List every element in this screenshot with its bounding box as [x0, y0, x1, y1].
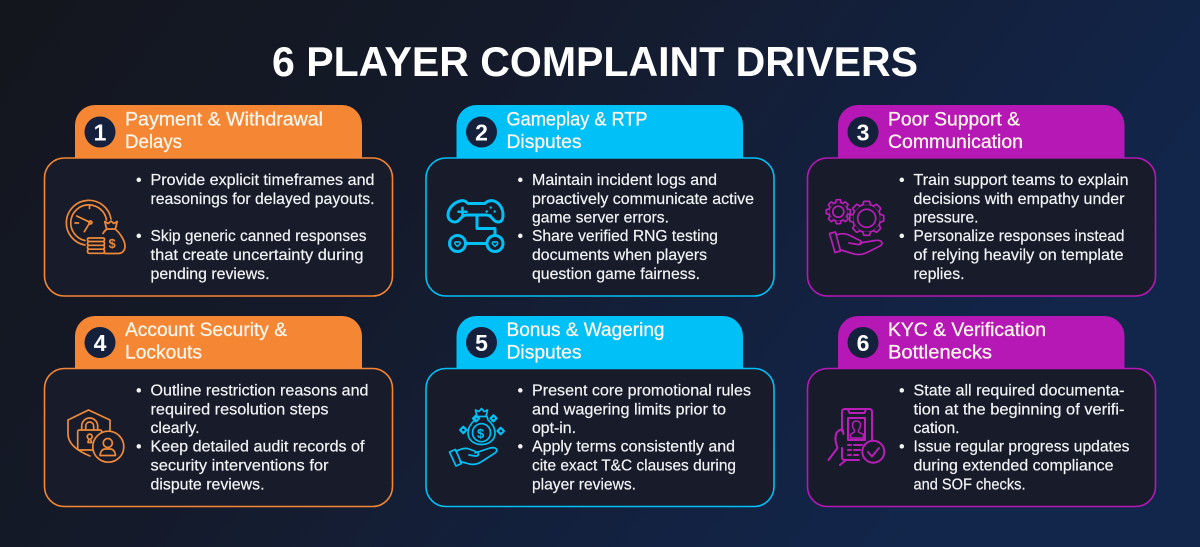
- bullet text 6: tion at the beginning of verifi-: [914, 402, 1124, 418]
- tab heading 2: [456, 105, 743, 160]
- bullet text 2: Maintain incident logs and: [532, 172, 717, 189]
- bullet text 4: dispute reviews.: [150, 476, 264, 494]
- bullet text 2: documents when players: [532, 247, 707, 264]
- bullet text 1: Skip generic canned responses: [150, 228, 366, 245]
- tab heading 3: 3: [857, 120, 869, 146]
- bullet text 4: Keep detailed audit records of: [150, 438, 365, 456]
- tab heading 4: 4: [94, 330, 107, 356]
- tab heading 5: Bonus & Wagering: [506, 319, 664, 341]
- bullet text 1: that create uncertainty during: [150, 247, 364, 264]
- tab heading 6: KYC & Verification: [888, 319, 1046, 341]
- bullet text 6: State all required documenta-: [914, 382, 1124, 400]
- bullet text 3: decisions with empathy under: [914, 191, 1125, 208]
- tab heading 1: 1: [94, 120, 107, 146]
- tab heading 3: Poor Support &: [888, 108, 1020, 130]
- bullet text 5: [518, 382, 751, 494]
- bullet text 2: game server errors.: [532, 210, 669, 226]
- bullet text 6: and SOF checks.: [914, 476, 1026, 494]
- bullet text 2: Share verified RNG testing: [532, 228, 718, 245]
- panel: KYC and verification bottlenecks: [808, 316, 1156, 506]
- tab heading 5: Disputes: [506, 342, 582, 364]
- bullet text 4: Outline restriction reasons and: [150, 382, 368, 400]
- tab heading 4: [75, 316, 362, 371]
- bullet text 2: proactively communicate active: [532, 191, 754, 208]
- bullet text 3: Train support teams to explain: [914, 172, 1128, 189]
- panel: poor support and communication: [808, 105, 1156, 296]
- icon: clock and money bag: [66, 200, 125, 254]
- title: 6 PLAYER COMPLAINT DRIVERS: [272, 38, 918, 85]
- bullet text 5: •: [518, 382, 523, 400]
- bullet text 4: •: [136, 382, 142, 400]
- icon: gears over open hand: [826, 200, 884, 254]
- panel: bonus and wagering disputes: [426, 316, 774, 506]
- card body 3: [808, 158, 1156, 296]
- icon label: dollar sign: $: [108, 236, 116, 251]
- card body 6: [808, 368, 1156, 506]
- bullet text 6: cation.: [914, 420, 960, 437]
- tab heading 6: Bottlenecks: [888, 342, 992, 364]
- bullet text 3: [899, 172, 1128, 283]
- bullet text 4: clearly.: [150, 420, 200, 437]
- bullet text 1: [136, 172, 374, 283]
- panel: gameplay and RTP disputes: [426, 105, 774, 296]
- bullet text 4: required resolution steps: [150, 402, 328, 418]
- bullet text 1: pending reviews.: [150, 266, 270, 283]
- bullet text 6: Issue regular progress updates: [914, 438, 1130, 456]
- bullet text 1: reasonings for delayed payouts.: [150, 191, 374, 208]
- card body 5: [426, 368, 774, 506]
- bullet text 2: [518, 172, 754, 283]
- tab heading 1: Delays: [125, 131, 182, 153]
- icon: phone ID verification: [828, 409, 884, 465]
- bullet text 6: [899, 382, 1130, 494]
- bullet text 3: •: [899, 228, 905, 245]
- bullet text 1: •: [136, 172, 142, 189]
- tab heading 6: [838, 316, 1124, 371]
- bullet text 2: •: [518, 172, 523, 189]
- bullet text 5: player reviews.: [532, 476, 636, 494]
- card body 4: [44, 368, 392, 506]
- tab heading 2: Gameplay & RTP: [506, 108, 648, 130]
- tab heading 3: Communication: [888, 131, 1023, 153]
- bullet text 6: •: [899, 438, 905, 456]
- icon: shield with padlock and user: [68, 410, 124, 462]
- bullet text 5: Present core promotional rules: [532, 382, 751, 400]
- tab heading 1: [75, 105, 362, 160]
- bullet text 4: security interventions for: [150, 458, 329, 474]
- bullet text 1: Provide explicit timeframes and: [150, 172, 374, 189]
- tab heading 5: [456, 316, 743, 371]
- tab heading 2: Disputes: [506, 131, 582, 153]
- bullet text 5: and wagering limits prior to: [532, 402, 726, 418]
- panel: payment and withdrawal delays: [44, 105, 392, 296]
- tab heading 3: [838, 105, 1124, 160]
- card body 2: [426, 158, 774, 296]
- icon label: dollar sign in bag: $: [477, 426, 485, 441]
- tab heading 1: Payment & Withdrawal: [125, 108, 323, 130]
- icon: money bag over open hand: [450, 408, 504, 466]
- bullet text 5: cite exact T&C clauses during: [532, 458, 736, 474]
- bullet text 2: question game fairness.: [532, 266, 700, 283]
- bullet text 3: of relying heavily on template: [914, 247, 1124, 264]
- bullet text 4: •: [136, 438, 142, 456]
- tab heading 4: Account Security &: [125, 319, 287, 341]
- bullet text 3: pressure.: [914, 210, 978, 226]
- tab heading 5: 5: [475, 330, 488, 356]
- icon: game controller with connected nodes: [448, 201, 503, 252]
- card body 1: [44, 158, 392, 296]
- tab heading 2: 2: [475, 120, 488, 146]
- bullet text 3: •: [899, 172, 905, 189]
- bullet text 6: •: [899, 382, 905, 400]
- tab heading 6: 6: [857, 330, 869, 356]
- bullet text 3: Personalize responses instead: [914, 228, 1124, 245]
- bullet text 6: during extended compliance: [914, 458, 1114, 474]
- bullet text 5: Apply terms consistently and: [532, 438, 735, 456]
- bullet text 5: opt-in.: [532, 420, 576, 437]
- tab heading 4: Lockouts: [125, 342, 202, 364]
- bullet text 1: •: [136, 228, 142, 245]
- panel: account security and lockouts: [44, 316, 392, 506]
- bullet text 4: [136, 382, 368, 494]
- bullet text 5: •: [518, 438, 523, 456]
- bullet text 2: •: [518, 228, 523, 245]
- bullet text 3: replies.: [914, 266, 964, 283]
